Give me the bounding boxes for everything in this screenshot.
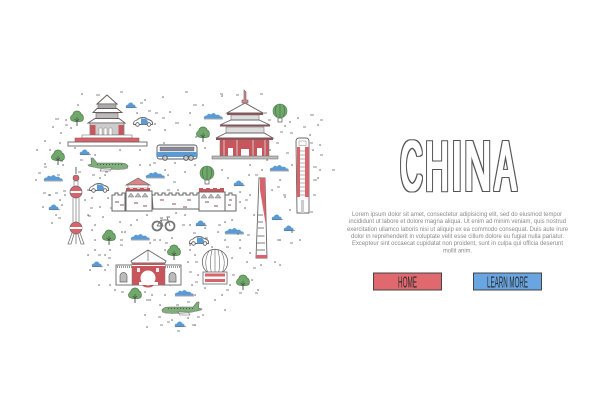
- tree 1: [70, 111, 83, 126]
- tree 5: [167, 245, 180, 260]
- cloud 14: [284, 225, 295, 231]
- cloud 6: [234, 180, 245, 186]
- cloud 9: [131, 234, 150, 240]
- landmark: oriental pearl tower: [68, 167, 84, 244]
- tree 4: [102, 230, 115, 245]
- airplane upper: [88, 158, 128, 171]
- body text: exercitation ullamco laboris nisi ut aliquip ex ea commodo consequat. Duis aute irure: [347, 226, 569, 233]
- landmark: city gate: [116, 250, 181, 286]
- tree 3: [51, 150, 64, 165]
- bicycle: [152, 217, 174, 230]
- cloud 13: [272, 214, 283, 220]
- cloud 4: [146, 172, 165, 178]
- cloud 16: [175, 321, 186, 327]
- cloud 2: [80, 149, 91, 155]
- cloud 12: [225, 228, 244, 234]
- text: A: [495, 127, 516, 205]
- car 1: [133, 117, 153, 126]
- landmark: great wall: [112, 178, 236, 211]
- landmark: domed building: [202, 249, 228, 284]
- landmark: world financial center: [256, 178, 268, 258]
- button: learn more: [474, 273, 542, 291]
- button: home: [374, 273, 442, 291]
- cloud 1: [126, 102, 137, 108]
- scattered dots and dashes forming heart: [36, 92, 335, 331]
- button: home: HOME: [398, 274, 417, 291]
- title: I: [451, 127, 462, 205]
- title: N: [464, 127, 491, 205]
- title: C: [400, 127, 422, 205]
- title: [400, 127, 516, 205]
- airplane lower: [162, 302, 202, 315]
- landmark: temple of heaven: [212, 90, 278, 159]
- body text: incididunt ut labore et dolore magna aliqua. Ut enim ad minim veniam, quis nostrud: [349, 218, 567, 225]
- body text: Excepteur sint occaecat cupidatat non proident, sunt in culpa qui officia deserunt: [352, 240, 563, 247]
- tree 6: [128, 288, 141, 303]
- cloud 10: [92, 261, 103, 267]
- title: H: [425, 127, 449, 205]
- body text: dolor in reprehenderit in voluptate velit esse cillum dolore eu fugiat nulla pariatur.: [351, 233, 564, 240]
- cloud 3: [44, 175, 63, 181]
- body text: [347, 211, 569, 254]
- body text: mollit anim.: [443, 248, 472, 254]
- cloud 8: [49, 204, 60, 210]
- button: learn more: LEARN MORE: [487, 274, 528, 291]
- car 3: [189, 236, 209, 245]
- balloon upper right: [273, 104, 287, 122]
- tree 2: [196, 127, 209, 142]
- landmark: pagoda temple left: [68, 95, 147, 146]
- cloud 15: [175, 290, 194, 296]
- cloud 5: [204, 113, 223, 119]
- cloud 7: [270, 165, 289, 171]
- tree 7: [236, 275, 249, 290]
- body text: Lorem ipsum dolor sit amet, consectetur adipisicing elit, sed do eiusmod tempor: [352, 211, 562, 218]
- landmark: shanghai tower: [296, 138, 309, 213]
- car 2: [89, 183, 109, 192]
- bus: [157, 145, 197, 160]
- balloon center: [200, 166, 214, 184]
- cloud 11: [196, 220, 207, 226]
